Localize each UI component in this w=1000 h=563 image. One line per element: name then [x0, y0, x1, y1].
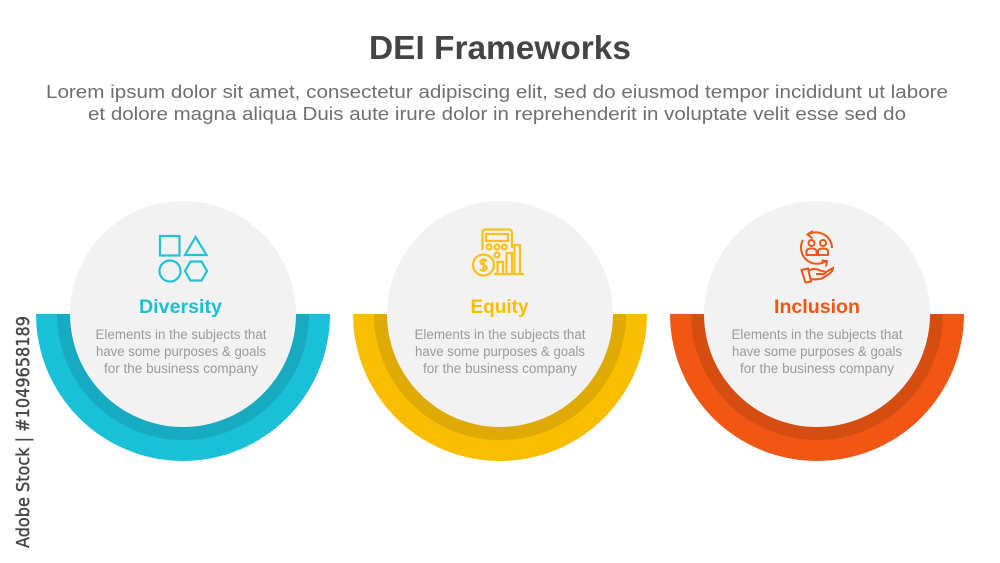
description: have some purposes & goals — [732, 344, 902, 359]
description: Elements in the subjects that — [414, 327, 586, 342]
panel: diversity — [36, 201, 330, 461]
circle — [704, 201, 930, 427]
circle — [387, 201, 613, 427]
description: for the business company — [104, 361, 258, 376]
icon: calculator and chart — [473, 230, 524, 276]
icon: shapes — [160, 236, 207, 282]
heading: inclusion: Inclusion — [774, 297, 860, 318]
icon: people and hand — [801, 231, 833, 282]
description — [96, 327, 267, 376]
description: for the business company — [423, 361, 577, 376]
description: for the business company — [740, 361, 894, 376]
heading: equity: Equity — [470, 297, 529, 318]
inner darker half ring — [691, 314, 943, 440]
outer half ring — [36, 314, 330, 461]
outer half ring — [353, 314, 647, 461]
description — [732, 327, 903, 376]
description: Elements in the subjects that — [732, 327, 903, 342]
description: have some purposes & goals — [96, 344, 266, 359]
inner darker half ring — [374, 314, 626, 440]
intro text: et dolore magna aliqua Duis aute irure dolor in reprehenderit in voluptate velit esse sed do — [88, 104, 906, 124]
description: Elements in the subjects that — [96, 327, 267, 342]
outer half ring — [670, 314, 964, 461]
stock credit: Adobe Stock | #1049658189 — [13, 316, 34, 548]
description — [414, 327, 586, 376]
intro text: Lorem ipsum dolor sit amet, consectetur adipiscing elit, sed do eiusmod tempor incididunt ut labore — [46, 82, 948, 102]
title: DEI Frameworks — [369, 29, 631, 66]
description: have some purposes & goals — [415, 344, 585, 359]
inner darker half ring — [57, 314, 309, 440]
panel: equity — [353, 201, 647, 461]
intro text — [46, 82, 948, 124]
heading: diversity: Diversity — [139, 297, 222, 318]
circle — [70, 201, 296, 427]
panel: inclusion — [670, 201, 964, 461]
